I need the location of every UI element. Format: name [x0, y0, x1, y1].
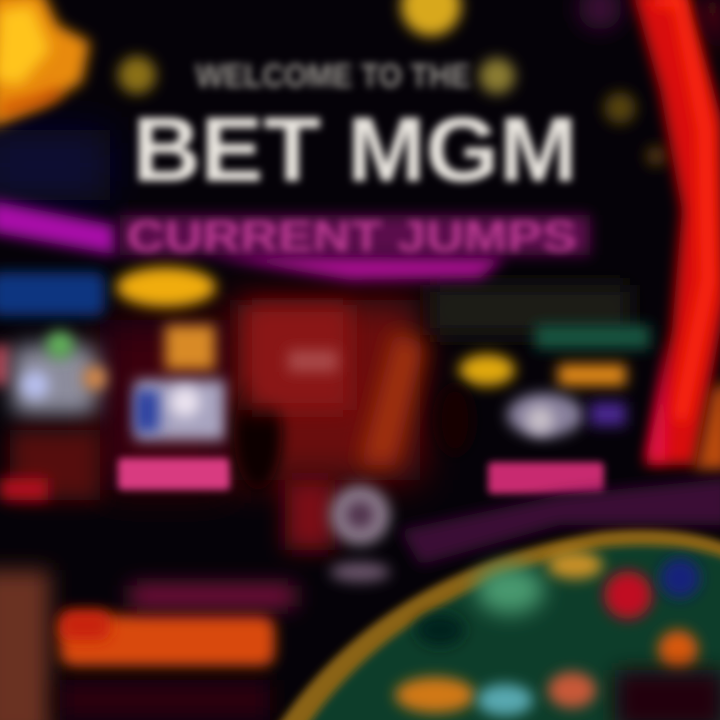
panel: right red neon arc: [632, 0, 720, 470]
panel: roulette wheel: [275, 530, 720, 720]
panel: bottom-left orange sofa: [60, 585, 295, 720]
pink label: [488, 462, 604, 494]
banner text: CURRENT JUMPS: [127, 212, 577, 261]
pink label: [118, 458, 230, 490]
panel: right slot machine: [437, 325, 650, 494]
title: BET MGM: [132, 99, 578, 201]
subtitle: WELCOME TO THE: [196, 57, 470, 94]
panel: centre-left slot machine: [116, 267, 282, 490]
gold light spots: [118, 0, 666, 166]
icon: top-left gold ornament: [0, 0, 90, 128]
orange pillar: [360, 330, 425, 465]
dark purple band behind wheel: [400, 478, 720, 565]
panel: magenta banner: [0, 200, 590, 280]
panel: left slot machine: [0, 272, 107, 500]
red centre card: [245, 305, 350, 550]
icon: centre round emblem: [330, 485, 390, 582]
top centre gold light: [401, 0, 461, 36]
